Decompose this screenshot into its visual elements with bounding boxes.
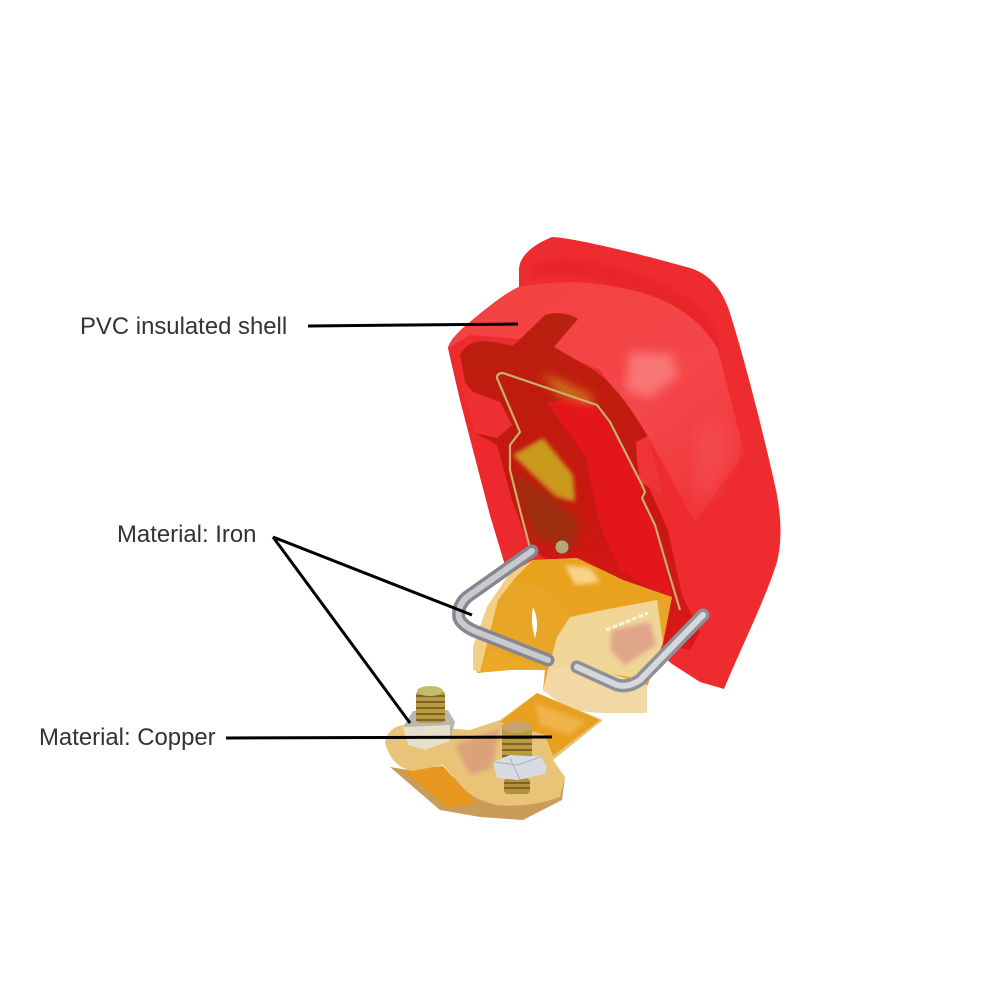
highlight on shell [625,352,678,398]
spring wire outline [497,373,680,610]
left bolt and nut [403,686,455,750]
pink reflection [455,728,500,775]
top face [512,558,670,617]
bright inner panel [547,395,672,600]
shell body [448,282,744,522]
leader lines: iron [273,537,472,723]
upper plate [385,693,603,806]
label: PVC insulated shell: PVC insulated shell [80,313,287,340]
product: battery terminal clamp with red cover [385,237,780,820]
gold back plate glow [513,438,575,502]
label: Material: Iron: Material: Iron [117,521,256,548]
rivet [555,540,569,554]
left wing rim [473,560,533,672]
inner tab right [636,436,662,495]
inner tab left [459,375,512,438]
leader line: copper [226,737,552,738]
lower left fold [480,650,545,672]
back flange channel [530,258,725,362]
rim strip left [448,348,530,565]
leader line: PVC shell [308,324,518,326]
iron wire bracket [459,551,703,686]
right bolt and nut [493,721,547,794]
label: Material: Copper: Material: Copper [39,724,216,751]
right clamp face [547,600,663,680]
lower copper plate [385,693,603,820]
shell interior [460,313,700,650]
upper copper clamp [473,558,672,713]
clamp tail [543,663,647,713]
clamp silhouette [473,558,672,713]
clamp gap [532,607,537,638]
red PVC shell [448,237,780,689]
orange arm [500,693,600,756]
underside [390,767,565,820]
